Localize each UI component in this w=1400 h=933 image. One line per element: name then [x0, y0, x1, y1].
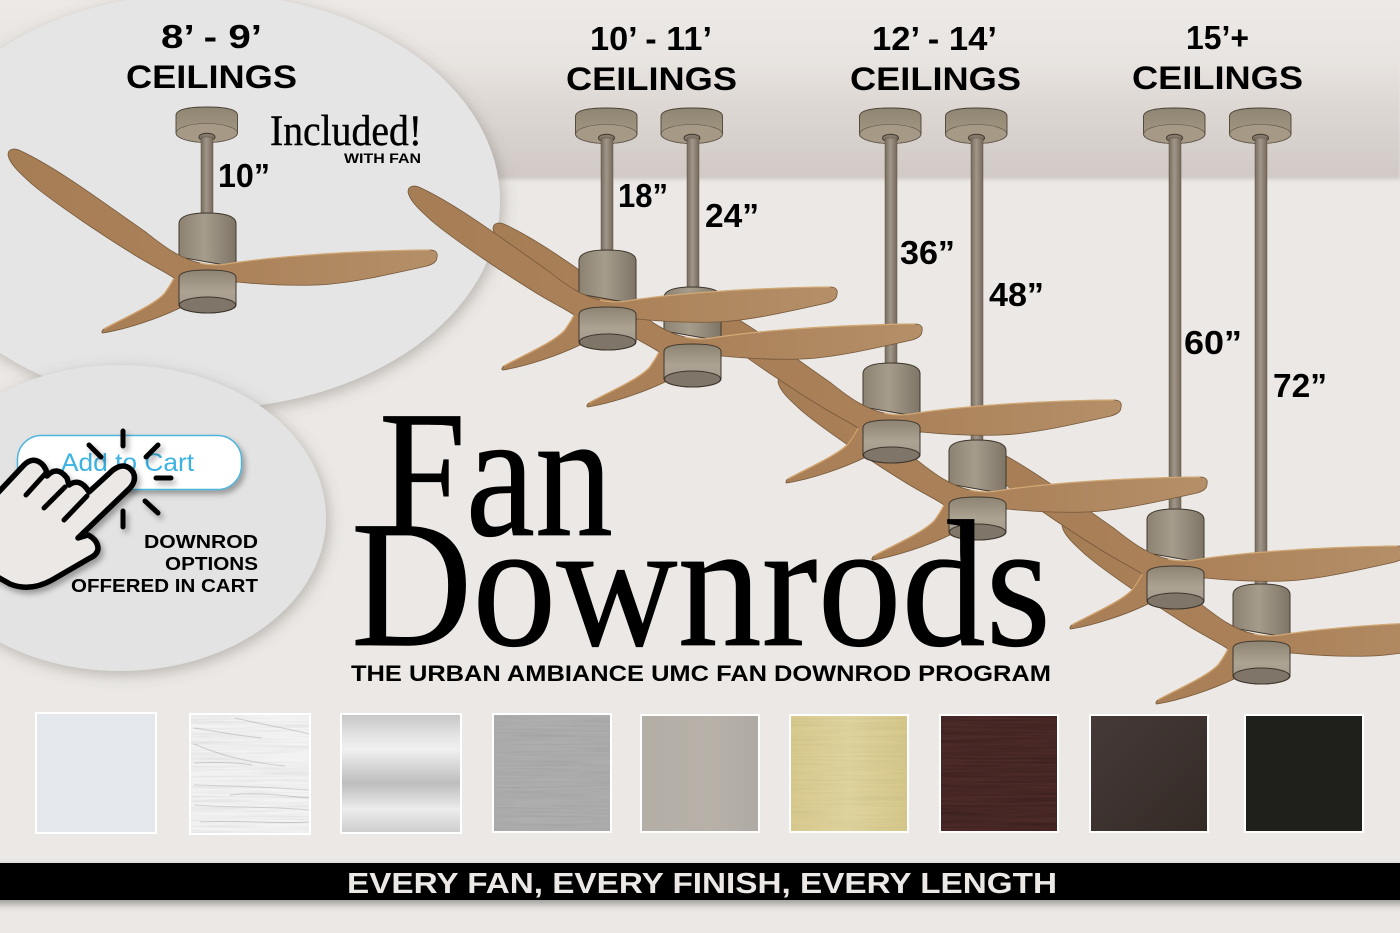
title: Fan Downrods [351, 375, 1051, 685]
heading: 15 foot plus ceilings: 15’+ [1186, 19, 1249, 56]
heading: 12 to 14 foot ceilings: CEILINGS [850, 61, 1021, 97]
heading: 10 to 11 foot ceilings [566, 20, 737, 97]
swatch: brushed nickel [493, 714, 611, 832]
heading: 8 to 9 foot ceilings: CEILINGS [126, 59, 297, 95]
blades and motor [493, 223, 922, 407]
heading: 12 to 14 foot ceilings: 12’ - 14’ [872, 20, 997, 57]
length label 60 inch: 60” [1184, 324, 1242, 361]
callout: included with fan: WITH FAN [344, 151, 421, 166]
text: downrod options offered in cart [71, 531, 259, 596]
heading: 10 to 11 foot ceilings: 10’ - 11’ [590, 20, 712, 57]
length label 24 inch: 24” [705, 197, 759, 234]
canopy [946, 108, 1007, 144]
icon: pointing hand [0, 460, 134, 587]
add to cart button [18, 436, 242, 490]
downrod 60 inch [1169, 138, 1181, 513]
fan: 60 inch downrod [976, 108, 1400, 629]
swatch: white wood [190, 714, 310, 834]
text: downrod options offered in cart: DOWNROD [144, 531, 258, 552]
fan: 24 inch downrod [493, 108, 922, 407]
heading: 8 to 9 foot ceilings: 8’ - 9’ [161, 18, 262, 55]
banner [0, 863, 1400, 900]
canopy [576, 108, 637, 144]
blades and motor [1062, 520, 1400, 704]
callout: included with fan: Included! [270, 108, 422, 155]
text: downrod options offered in cart: OFFERED IN CART [71, 575, 259, 596]
fan: 10 inch downrod [8, 107, 437, 333]
blades and motor [692, 299, 1121, 483]
downrod 36 inch [885, 138, 897, 368]
swatch: polished chrome [341, 714, 461, 833]
heading: 15 foot plus ceilings: CEILINGS [1132, 60, 1303, 96]
length label 18 inch: 18” [618, 177, 668, 214]
swatch: black [1245, 715, 1363, 832]
icon: click sparks [89, 431, 171, 527]
length label 10 inch: 10” [218, 157, 270, 194]
fan: 36 inch downrod [692, 108, 1121, 483]
length label 72 inch: 72” [1273, 367, 1327, 404]
fan: 72 inch downrod [1062, 108, 1400, 704]
panel: included ten inch downrod oval [0, 0, 500, 409]
text: downrod options offered in cart: OPTIONS [165, 553, 258, 574]
canopy [176, 107, 238, 142]
fan: 48 inch downrod [778, 108, 1207, 560]
canopy [860, 108, 921, 144]
downrod 72 inch [1255, 138, 1267, 588]
panel: add to cart oval [0, 365, 326, 671]
blades and motor [408, 186, 837, 370]
swatch: brushed brass [790, 715, 908, 832]
downrod 10 inch [201, 137, 213, 217]
length label 36 inch: 36” [900, 234, 955, 271]
canopy [1230, 108, 1291, 144]
ceiling band [0, 0, 1400, 182]
heading: 12 to 14 foot ceilings [850, 20, 1021, 97]
canopy [1144, 108, 1205, 144]
heading: 10 to 11 foot ceilings: CEILINGS [566, 61, 737, 97]
swatch: white [36, 713, 156, 833]
banner: EVERY FAN, EVERY FINISH, EVERY LENGTH [347, 868, 1057, 900]
subtitle: THE URBAN AMBIANCE UMC FAN DOWNROD PROGRAM [351, 661, 1051, 686]
length label 48 inch: 48” [989, 276, 1044, 313]
canopy [661, 108, 722, 144]
swatch: oil rubbed bronze [1090, 715, 1208, 832]
swatch: walnut wood [940, 715, 1058, 832]
heading: 8 to 9 foot ceilings [126, 18, 297, 95]
heading: 15 foot plus ceilings [1132, 19, 1303, 96]
downrod 18 inch [601, 138, 613, 254]
blades and motor [8, 149, 437, 333]
blades and motor [976, 445, 1400, 629]
blades and motor [778, 376, 1207, 560]
swatch: taupe [641, 715, 759, 832]
downrod 24 inch [687, 138, 699, 291]
add to cart button: Add to Cart [61, 449, 194, 477]
title: Fan Downrods: Downrods [351, 485, 1051, 685]
downrod 48 inch [971, 138, 983, 444]
fan: 18 inch downrod [408, 108, 837, 370]
title: Fan Downrods: Fan [379, 375, 613, 575]
